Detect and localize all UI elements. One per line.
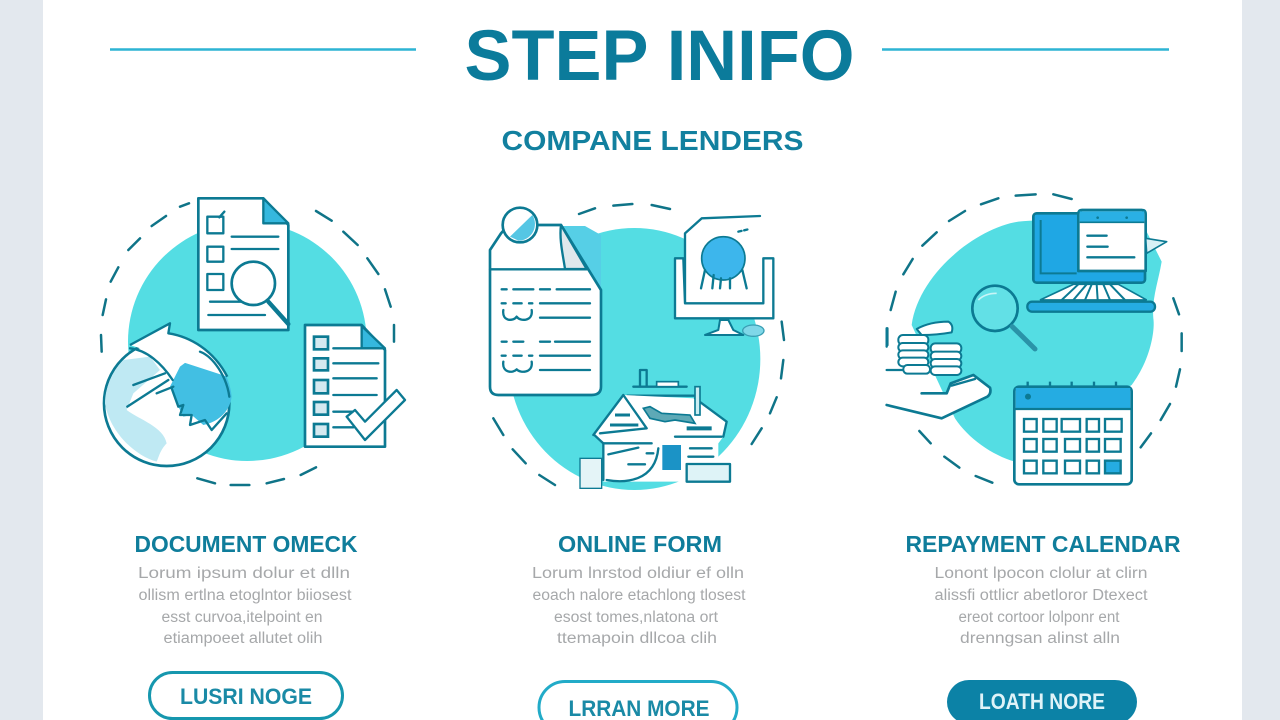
icon: monitor and keyboard xyxy=(1027,210,1167,312)
column text: online form: eoach nalore etachlong tlosest xyxy=(532,587,746,604)
icon: coins on hand xyxy=(887,322,990,418)
column text: document check: Lorum ipsum dolur et dlln xyxy=(138,565,350,582)
button: online form xyxy=(539,682,737,720)
column text: repayment calendar: drenngsan alinst alln xyxy=(960,630,1120,647)
column text: document check: esst curvoa,itelpoint en xyxy=(162,609,322,626)
column text: document check: DOCUMENT OMECK xyxy=(134,531,358,557)
button: document check xyxy=(150,672,342,718)
column text: online form: ONLINE FORM xyxy=(558,531,722,557)
teal disc xyxy=(128,222,367,461)
column text: online form: ttemapoin dllcoa clih xyxy=(557,630,717,647)
teal blob xyxy=(912,220,1162,462)
icon: calendar xyxy=(1014,382,1132,484)
icon: house xyxy=(580,370,730,488)
column text: repayment calendar: REPAYMENT CALENDAR xyxy=(906,531,1181,557)
column text: online form xyxy=(532,531,746,647)
column text: online form: esost tomes,nlatona ort xyxy=(554,609,719,626)
dashed ring xyxy=(887,194,1182,483)
column text: online form: Lorum lnrstod oldiur ef olln xyxy=(532,565,744,582)
column text: document check: etiampoeet allutet olih xyxy=(164,630,322,647)
icon: globe with arrow xyxy=(104,323,232,466)
icon: form document xyxy=(490,208,601,395)
column text: document check xyxy=(134,531,358,647)
dashed ring xyxy=(101,203,394,485)
column text: repayment calendar: Lonont lpocon clolur at clirn xyxy=(934,565,1148,582)
button: document check: LUSRI NOGE xyxy=(180,684,312,709)
icon: magnifier xyxy=(972,286,1035,349)
icon: checklist with tick xyxy=(305,325,405,447)
subtitle: COMPANE LENDERS xyxy=(502,125,804,156)
teal disc xyxy=(508,228,760,490)
column text: repayment calendar: ereot cortoor lolponr ent xyxy=(958,609,1120,626)
panel: repayment calendar illustration xyxy=(887,194,1182,484)
button: repayment calendar: LOATH NORE xyxy=(979,689,1105,714)
column text: repayment calendar: alissfi ottlicr abetloror Dtexect xyxy=(934,587,1148,604)
icon: document with magnifier xyxy=(198,198,288,330)
dashed ring xyxy=(493,204,784,485)
button: repayment calendar xyxy=(947,680,1137,720)
column text: repayment calendar xyxy=(906,531,1181,647)
panel: online form illustration xyxy=(490,204,784,490)
icon: monitor with globe xyxy=(675,216,773,336)
column text: document check: ollism ertlna etoglntor biiosest xyxy=(138,587,352,604)
panel: document check illustration xyxy=(101,198,405,485)
title header: STEP INIFO xyxy=(464,17,854,96)
